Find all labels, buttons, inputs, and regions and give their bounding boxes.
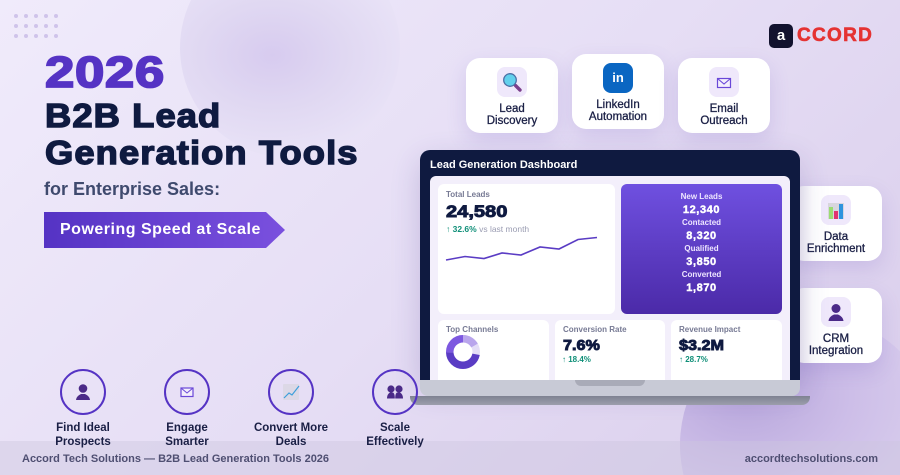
footer right text: accordtechsolutions.com — [745, 453, 878, 465]
icon: person — [821, 297, 851, 327]
value: 24,580 — [446, 202, 507, 221]
icon: magnifier — [497, 67, 527, 97]
label: scale effectively: Scale — [380, 422, 410, 434]
card: lead discovery — [466, 58, 558, 133]
label: Data — [824, 231, 848, 243]
label: Email — [710, 103, 738, 115]
label: engage smarter — [165, 422, 209, 448]
label: Lead — [499, 103, 525, 115]
label: Automation — [589, 111, 647, 123]
feature: scale effectively — [372, 369, 418, 415]
feature: find ideal prospects — [60, 369, 106, 415]
dot pattern — [14, 14, 58, 38]
footer left text: Accord Tech Solutions — B2B Lead Generation Tools 2026 — [22, 453, 329, 465]
subtitle: for Enterprise Sales: — [44, 179, 220, 199]
label: Revenue Impact — [679, 325, 740, 334]
label: Top Channels — [446, 325, 498, 334]
title line 2: Generation Tools — [45, 135, 359, 172]
title year: 2026 — [45, 48, 165, 97]
label: find ideal prospects: Find Ideal — [56, 422, 110, 434]
laptop notch — [575, 380, 645, 386]
card: email outreach — [678, 58, 770, 133]
value: $3.2M — [679, 337, 724, 354]
card: crm integration — [790, 288, 882, 363]
converted value: 1,870 — [686, 282, 717, 294]
growth: ↑ 28.7% — [679, 355, 708, 364]
converted: Converted — [682, 270, 721, 279]
label — [487, 102, 538, 127]
label: scale effectively — [366, 422, 424, 448]
label — [700, 102, 748, 127]
new leads: New Leads — [681, 192, 722, 201]
logo — [769, 24, 873, 48]
label: CRM — [823, 333, 849, 345]
qualified: Qualified — [684, 244, 719, 253]
label: LinkedIn — [596, 99, 640, 111]
dashboard heading: Lead Generation Dashboard — [430, 159, 577, 171]
label: find ideal prospects — [55, 422, 111, 448]
label: Enrichment — [807, 243, 865, 255]
contacted value: 8,320 — [686, 230, 717, 242]
arrow banner — [44, 212, 285, 248]
qualified value: 3,850 — [686, 256, 717, 268]
label: Discovery — [487, 115, 537, 127]
panel: conversion rate — [555, 320, 665, 381]
card: linkedin automation — [572, 54, 664, 129]
line chart — [446, 236, 598, 261]
label — [809, 333, 863, 357]
label: Total Leads — [446, 190, 490, 199]
laptop screen: dashboard — [420, 150, 800, 381]
label: convert more deals: Deals — [276, 436, 306, 448]
laptop foot — [410, 396, 810, 405]
logo mark: a — [777, 27, 785, 44]
growth: ↑ 18.4% — [562, 355, 591, 364]
panel: top channels — [438, 320, 549, 381]
label: engage smarter: Smarter — [165, 436, 209, 448]
background circle bottom right — [680, 337, 900, 475]
panel: total leads — [438, 184, 615, 314]
icon: linkedin: in — [612, 70, 624, 85]
logo mark — [769, 24, 793, 48]
label: Outreach — [700, 115, 748, 127]
card: data enrichment — [790, 186, 882, 261]
icon: linkedin — [603, 63, 633, 93]
footer band — [0, 441, 900, 475]
label: engage smarter: Engage — [166, 422, 208, 434]
feature: engage smarter — [164, 369, 210, 415]
donut chart — [446, 335, 480, 369]
panel: funnel — [621, 184, 782, 314]
growth: ↑ 32.6% vs last month — [446, 224, 529, 234]
logo word: CCORD — [797, 25, 873, 46]
feature: convert more deals — [268, 369, 314, 415]
banner text: Powering Speed at Scale — [60, 221, 261, 238]
label — [588, 98, 647, 123]
label: scale effectively: Effectively — [366, 436, 424, 448]
value: 7.6% — [563, 337, 600, 354]
label — [807, 231, 866, 255]
dashboard body — [430, 176, 790, 381]
panel: revenue impact — [671, 320, 782, 381]
icon: bar chart — [821, 195, 851, 225]
background circle top — [180, 0, 364, 124]
icon: envelope — [709, 67, 739, 97]
label: Conversion Rate — [563, 325, 627, 334]
label: find ideal prospects: Prospects — [55, 436, 111, 448]
label: convert more deals: Convert More — [254, 422, 328, 434]
title line 1: B2B Lead — [45, 98, 221, 135]
laptop base — [420, 380, 800, 396]
label: Integration — [809, 345, 863, 357]
contacted: Contacted — [682, 218, 721, 227]
label: convert more deals — [254, 422, 328, 448]
new leads value: 12,340 — [683, 204, 720, 216]
